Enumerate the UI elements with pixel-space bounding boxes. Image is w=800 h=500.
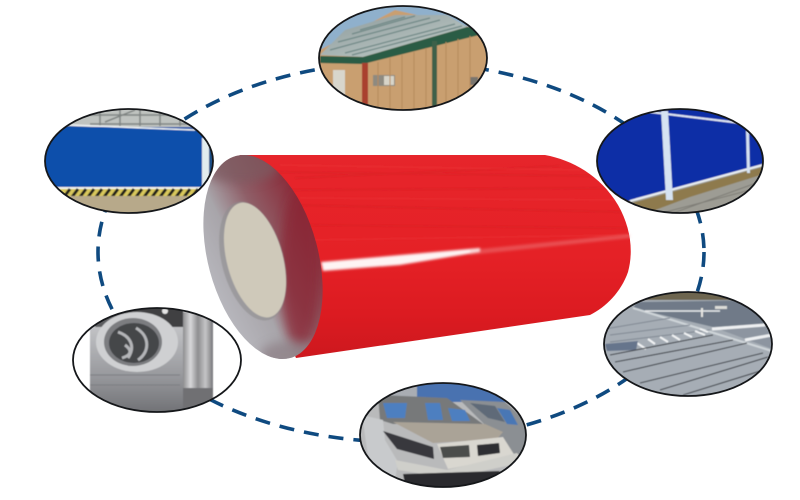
dashed ring connecting the applications — [98, 62, 704, 442]
coil centre hole — [207, 194, 299, 328]
photo: stainless washing machine — [73, 305, 241, 416]
red coated steel coil — [203, 155, 631, 359]
photo: blue fence panel — [44, 108, 214, 214]
coil end face — [203, 155, 323, 359]
photo: standing seam metal roof — [600, 288, 776, 400]
glossy highlight — [321, 234, 630, 271]
photo: car body shells — [355, 380, 531, 492]
coil body — [240, 155, 631, 358]
photo: blue panel wall with posts — [596, 108, 764, 214]
photo: building with metal roof — [318, 5, 488, 111]
